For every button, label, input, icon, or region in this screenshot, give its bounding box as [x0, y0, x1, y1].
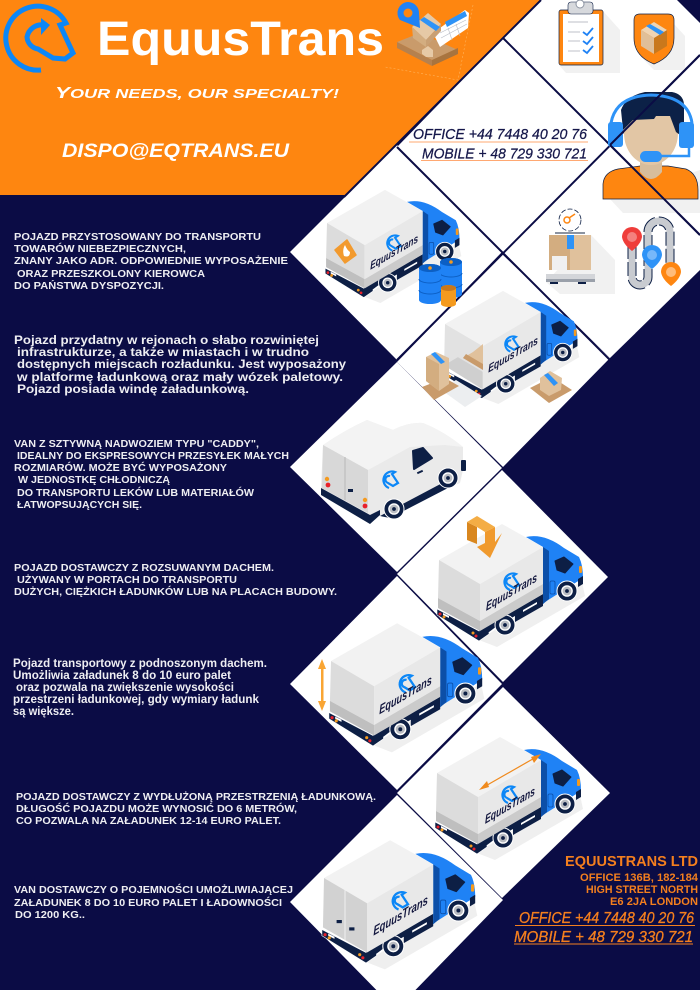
truck logo	[504, 573, 519, 590]
truck: raised roof	[329, 623, 484, 752]
text block: extended vehicle	[16, 790, 376, 827]
text block: caddy van: DO TRANSPORTU LEKÓW LUB MATERIAŁÓW	[17, 486, 254, 499]
phone numbers	[409, 126, 588, 162]
truck logo	[400, 675, 415, 692]
text block: ADR vehicle: ZNANY JAKO ADR. ODPOWIEDNIE WYPOSAŻENIE	[14, 254, 288, 267]
brand name: EquusTrans	[97, 13, 384, 66]
van logo	[383, 471, 398, 488]
truck logo	[387, 235, 401, 251]
icon: route with map pins	[622, 221, 681, 286]
text block: ADR vehicle: ORAZ PRZESZKOLONY KIEROWCA	[17, 268, 205, 280]
icon: shield with parcel	[634, 14, 685, 70]
text block: box van: ZAŁADUNEK 8 DO 10 EURO PALET I ŁADOWNOŚCI	[14, 896, 282, 909]
text block: ADR vehicle	[14, 231, 288, 292]
van: caddy	[321, 420, 466, 524]
arrow: loading from above	[467, 516, 502, 558]
text block: extended vehicle: DŁUGOŚĆ POJAZDU MOŻE WYNOSIĆ DO 6 METRÓW,	[16, 802, 297, 815]
icon: clipboard checklist	[559, 0, 620, 73]
text block: ADR vehicle: DO PAŃSTWA DYSPOZYCJI.	[14, 279, 164, 292]
truck: 8-10 pallet box van	[322, 840, 477, 969]
text block: extended vehicle: POJAZD DOSTAWCZY Z WYDŁUŻONĄ PRZESTRZENIĄ ŁADUNKOWĄ.	[16, 790, 376, 803]
company address and contact: E6 2JA LONDON	[610, 896, 698, 908]
icon: ADR hazard sign	[335, 240, 356, 263]
truck: sliding roof	[437, 524, 585, 647]
text block: tail lift vehicle: Pojazd posiada windę załadunkową.	[17, 384, 249, 396]
phone numbers: MOBILE + 48 729 330 721	[422, 146, 587, 162]
text block: caddy van	[14, 438, 289, 511]
diagonal divider lines	[344, 0, 700, 360]
truck: extended length	[435, 737, 583, 860]
text block: raised roof vehicle: oraz pozwala na zwiększenie wysokości	[16, 682, 234, 694]
text block: caddy van: VAN Z SZTYWNĄ NADWOZIEM TYPU "CADDY",	[14, 438, 259, 450]
text block: tail lift vehicle: Pojazd przydatny w rejonach o słabo rozwiniętej	[14, 335, 319, 347]
text block: tail lift vehicle: w platformę ładunkową oraz mały wózek paletowy.	[16, 372, 343, 384]
slogan: Y OUR NEEDS, OUR SPECIALTY!	[55, 85, 339, 102]
truck logo	[502, 786, 517, 803]
truck name: EquusTrans	[373, 893, 428, 939]
icon: blue and orange drums	[419, 258, 462, 307]
company address and contact: EQUUSTRANS LTD	[565, 854, 698, 870]
truck name: EquusTrans	[488, 333, 538, 376]
text block: box van: VAN DOSTAWCZY O POJEMNOŚCI UMOŻLIWIAJĄCEJ	[14, 883, 293, 896]
text block: box van: DO 1200 KG..	[15, 909, 85, 921]
text block: box van	[14, 883, 293, 921]
truck logo	[505, 336, 519, 352]
logo: horse head	[6, 6, 73, 70]
text block: raised roof vehicle: Pojazd transportowy z podnoszonym dachem.	[13, 658, 267, 670]
company address and contact: MOBILE + 48 729 330 721	[514, 929, 693, 946]
company address and contact	[514, 854, 699, 946]
phone numbers: OFFICE +44 7448 40 20 76	[413, 126, 588, 143]
text block: tail lift vehicle: infrastrukturze, a także w miastach i w trudno	[17, 347, 309, 359]
text block: tail lift vehicle: dostępnych miejscach rozładunku. Jest wyposażony	[17, 359, 347, 371]
text block: raised roof vehicle	[13, 658, 267, 718]
text block: raised roof vehicle: przestrzeni ładunkowej, gdy wymiary ładunk	[13, 694, 260, 706]
icon: cargo, pallets and ramp	[422, 344, 572, 407]
text block: tail lift vehicle	[14, 335, 347, 396]
text block: caddy van: IDEALNY DO EKSPRESOWYCH PRZESYŁEK MAŁYCH	[17, 450, 289, 462]
email: DISPO@EQTRANS.EU	[62, 141, 290, 162]
truck name: EquusTrans	[486, 570, 537, 614]
text block: ADR vehicle: POJAZD PRZYSTOSOWANY DO TRANSPORTU	[14, 231, 261, 243]
arrow: length	[479, 754, 541, 790]
white diamond tiles	[290, 0, 700, 990]
text block: ADR vehicle: TOWARÓW NIEBEZPIECZNYCH,	[14, 242, 186, 255]
text block: caddy van: W JEDNOSTKĘ CHŁODNICZĄ	[18, 474, 170, 486]
truck name: EquusTrans	[485, 783, 535, 827]
truck name: EquusTrans	[379, 673, 432, 718]
text block: raised roof vehicle: Umożliwia załadunek 8 do 10 euro palet	[13, 670, 231, 682]
icon: customer service agent	[603, 55, 700, 235]
text block: caddy van: ŁATWOPSUJĄCYCH SIĘ.	[17, 499, 142, 511]
company address and contact: HIGH STREET NORTH	[586, 884, 698, 896]
truck: tail lift	[443, 291, 579, 404]
text block: caddy van: ROZMIARÓW. MOŻE BYĆ WYPOSAŻONY	[14, 461, 227, 474]
text block: sliding roof vehicle	[14, 562, 337, 598]
text block: raised roof vehicle: są większe.	[13, 706, 74, 718]
icon: parcel on scale	[546, 209, 615, 294]
text block: sliding roof vehicle: POJAZD DOSTAWCZY Z ROZSUWANYM DACHEM.	[14, 562, 274, 574]
arrow: height	[318, 659, 326, 711]
truck: ADR with drums	[325, 190, 461, 303]
truck name: EquusTrans	[370, 232, 418, 273]
truck logo	[393, 892, 408, 910]
text block: sliding roof vehicle: DUŻYCH, CIĘŻKICH ŁADUNKÓW LUB NA PLACACH BUDOWY.	[14, 585, 337, 598]
company address and contact: OFFICE 136B, 182-184	[580, 872, 699, 884]
text block: sliding roof vehicle: UŻYWANY W PORTACH DO TRANSPORTU	[17, 573, 237, 586]
text block: extended vehicle: CO POZWALA NA ZAŁADUNEK 12-14 EURO PALET.	[16, 815, 281, 827]
icon: pallet, parcel, calculator and pin	[385, 2, 473, 80]
orange header panel	[0, 0, 540, 195]
